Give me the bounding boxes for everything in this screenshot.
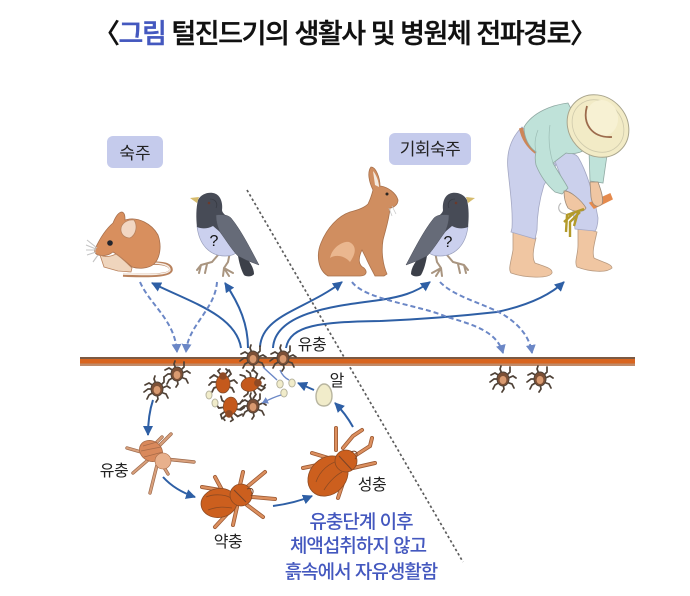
label: adult: 성충 xyxy=(358,476,386,494)
farmer belt xyxy=(521,128,536,152)
farmer trousers xyxy=(553,153,598,231)
title: 〈그림 털진드기의 생활사 및 병원체 전파경로〉 xyxy=(93,19,597,49)
label: host: 숙주 xyxy=(119,144,151,163)
label: opportunistic host: 기회숙주 xyxy=(400,140,460,159)
larvae below ground, right xyxy=(490,366,553,392)
callout: free-living note: 체액섭취하지 않고 xyxy=(290,535,427,557)
farmer shirt xyxy=(524,103,590,194)
larvae on the surface xyxy=(240,345,296,371)
icon: bird (host): ? xyxy=(210,233,219,250)
label: larva: 유충 xyxy=(100,462,128,480)
icon: rabbit xyxy=(318,167,398,276)
larvae below ground, left xyxy=(144,361,190,402)
nymph xyxy=(199,472,275,527)
icon: farmer xyxy=(508,82,642,277)
large egg xyxy=(316,384,332,406)
farmer hands and carrot xyxy=(590,194,612,208)
arrows: dashed return to soil xyxy=(140,282,532,353)
icon: bird (opportunistic host) xyxy=(406,193,475,276)
callout: free-living note xyxy=(285,511,438,583)
thin arrows: eggs to mites xyxy=(262,367,289,403)
label: nymph: 약충 xyxy=(214,533,242,551)
mite cluster xyxy=(209,368,267,423)
label: egg: 알 xyxy=(330,372,345,390)
dotted divider between host groups xyxy=(247,190,463,562)
eggs xyxy=(206,379,295,407)
farmer hat xyxy=(554,82,642,170)
icon: mouse xyxy=(86,212,171,275)
callout: free-living note: 유충단계 이후 xyxy=(309,511,413,533)
icon: bird (host) xyxy=(190,193,259,276)
farmer legs xyxy=(510,232,552,277)
ground line xyxy=(80,357,635,366)
arrows: life cycle xyxy=(148,383,353,506)
larva xyxy=(127,434,194,493)
callout: free-living note: 흙속에서 자유생활함 xyxy=(285,561,438,583)
label: host xyxy=(107,136,163,168)
arrows: larvae climb to hosts xyxy=(152,282,564,348)
icon: bird (opportunistic host): ? xyxy=(444,234,453,251)
label: larva (surface): 유충 xyxy=(298,336,326,354)
label: opportunistic host xyxy=(389,133,471,165)
adult mite xyxy=(300,428,375,504)
